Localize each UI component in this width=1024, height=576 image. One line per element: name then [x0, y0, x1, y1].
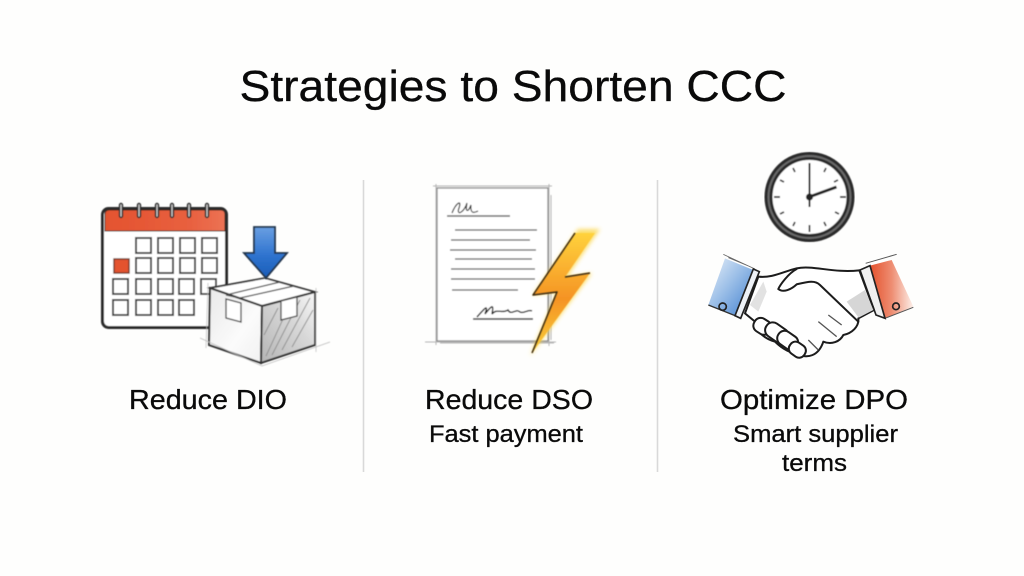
label: Fast payment: Fast payment [429, 421, 583, 448]
left cuff [708, 258, 753, 316]
hands [745, 268, 874, 356]
title: Strategies to Shorten CCC [240, 62, 786, 111]
icon: handshake [708, 254, 913, 360]
label: Reduce DIO: Reduce DIO [129, 384, 287, 415]
icon: signed document [425, 184, 556, 346]
icon: down arrow [244, 227, 287, 278]
panel: reduce DIO [102, 205, 330, 415]
divider: left [362, 180, 364, 472]
divider: right [656, 180, 658, 472]
icon: clock [768, 156, 850, 238]
label: Smart supplier terms: Smart supplier [733, 421, 898, 448]
label: Smart supplier terms: terms [782, 450, 847, 477]
icon: lightning bolt [530, 229, 600, 356]
icon: cardboard box [200, 278, 330, 366]
panel: reduce DSO [425, 184, 600, 448]
label: Smart supplier terms [733, 421, 898, 477]
right cuff [870, 260, 913, 318]
label: Reduce DSO: Reduce DSO [425, 384, 593, 415]
label: Optimize DPO: Optimize DPO [720, 384, 908, 415]
icon: calendar [102, 205, 226, 328]
panel: optimize DPO [708, 156, 913, 477]
